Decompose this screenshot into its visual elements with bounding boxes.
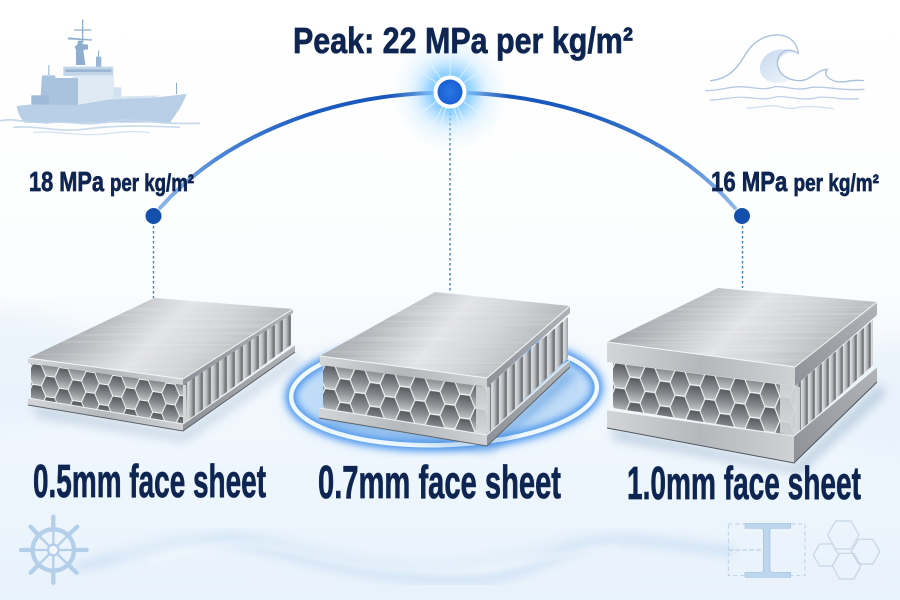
panel: 1.0mm sandwich [600,282,886,474]
heading: peak value: Peak: 22 MPa per kg/m² [293,20,633,61]
icon: ship [0,19,200,135]
panel: 0.7mm sandwich [315,285,575,452]
icon: hexagon cluster [813,521,880,579]
dotted leader lines [154,108,742,298]
performance arc [160,93,735,208]
label: 0.7mm face sheet: 0.7mm face sheet [318,456,561,508]
label: 0.5mm face sheet: 0.5mm face sheet [33,455,266,507]
icon: I-beam [728,523,805,577]
icon: ship wheel [21,517,87,583]
icon: wave [706,35,864,109]
right data point [734,208,750,224]
highlight ring under middle panel [289,334,599,450]
label: left value: 18 MPa per kg/m² [29,166,194,197]
panel: 0.5mm sandwich [20,290,300,442]
label: right value: 16 MPa per kg/m² [711,166,879,197]
left data point [146,208,162,224]
peak marker [390,32,510,152]
bottom water streaks [80,533,730,580]
